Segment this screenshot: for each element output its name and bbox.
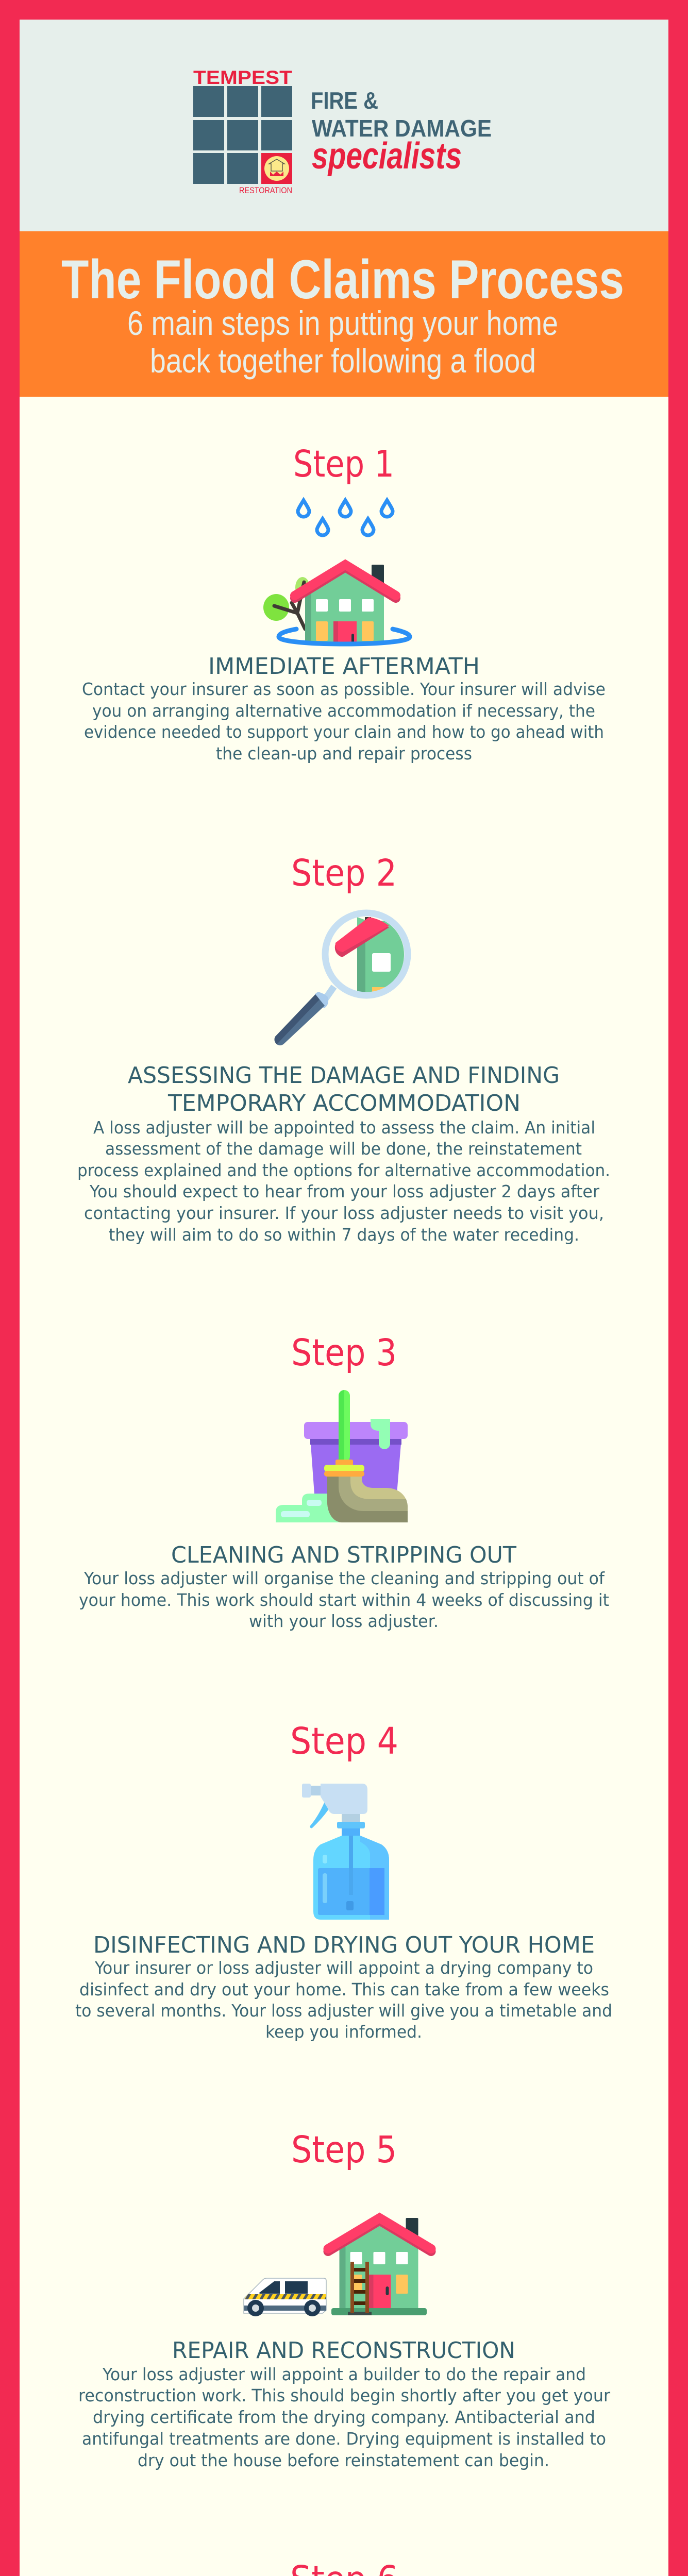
- step 5 body text: antifungal treatments are done. Drying equipment is installed to: [82, 2429, 606, 2449]
- step 2 label: Step 2: [291, 852, 397, 894]
- step 5: [78, 2128, 610, 2470]
- step 5 body text: dry out the house before reinstatement can begin.: [138, 2450, 549, 2470]
- step 4 body text: Your insurer or loss adjuster will appoint a drying company to: [94, 1958, 593, 1978]
- icon: bucket and mop: [276, 1390, 408, 1522]
- panel: title banner: [20, 231, 668, 397]
- step 2 body text: [77, 1117, 610, 1245]
- step 2: [77, 852, 610, 1245]
- icon: flooded house: [263, 565, 410, 644]
- step 3: [79, 1331, 609, 1631]
- icon: magnifying glass over house: [275, 913, 408, 1045]
- step 3 body text: [79, 1568, 609, 1631]
- step 3 label: Step 3: [291, 1331, 397, 1374]
- step 4 body text: disinfect and dry out your home. This can take from a few weeks: [79, 1979, 609, 1999]
- step 4: [75, 1720, 612, 2042]
- step 4 body text: keep you informed.: [265, 2022, 422, 2042]
- logo: Tempest top: TEMPEST: [193, 67, 292, 88]
- step 1 body text: you on arranging alternative accommodation if necessary, the: [92, 701, 595, 721]
- step 2 body text: assessment of the damage will be done, the reinstatement: [105, 1139, 582, 1159]
- logo: Tempest top: FIRE &: [311, 87, 378, 114]
- logo: Tempest top: specialists: [312, 135, 462, 177]
- step 2 heading: [128, 1062, 560, 1116]
- step 2 body text: You should expect to hear from your loss adjuster 2 days after: [89, 1181, 599, 1201]
- icon: spray bottle: [302, 1784, 389, 1920]
- step 1 body text: Contact your insurer as soon as possible. Your insurer will advise: [82, 679, 606, 699]
- step 5 body text: reconstruction work. This should begin shortly after you get your: [78, 2385, 610, 2405]
- logo: Tempest top: [193, 67, 492, 195]
- step 4 body text: [75, 1958, 612, 2042]
- step 3 heading: CLEANING AND STRIPPING OUT: [171, 1542, 516, 1568]
- step 2 body text: contacting your insurer. If your loss adjuster needs to visit you,: [84, 1203, 604, 1223]
- logo: Tempest top: WATER DAMAGE: [312, 115, 492, 142]
- step 2 body text: they will aim to do so within 7 days of the water receding.: [109, 1225, 579, 1245]
- subtitle: back together following a flood: [150, 342, 536, 380]
- step 3 body text: with your loss adjuster.: [249, 1611, 439, 1631]
- icon: house with ladder and van: [244, 2218, 431, 2316]
- step 1 label: Step 1: [293, 443, 394, 485]
- logo: Tempest top: RESTORATION: [239, 185, 292, 195]
- panel: steps background: [20, 397, 668, 2576]
- step 4 body text: to several months. Your loss adjuster will give you a timetable and: [75, 2001, 612, 2021]
- subtitle: [127, 304, 558, 380]
- step 1: [82, 443, 606, 764]
- step 5 heading: REPAIR AND RECONSTRUCTION: [172, 2337, 515, 2364]
- step 2 body text: process explained and the options for alternative accommodation.: [77, 1160, 610, 1180]
- step 5 body text: Your loss adjuster will appoint a builder to do the repair and: [102, 2364, 586, 2384]
- step 4 label: Step 4: [290, 1720, 398, 1762]
- subtitle: 6 main steps in putting your home: [127, 304, 558, 342]
- step 5 body text: [78, 2364, 610, 2470]
- step 1 body text: the clean-up and repair process: [216, 743, 472, 764]
- step 2 heading: TEMPORARY ACCOMMODATION: [167, 1090, 521, 1116]
- step 1 heading: IMMEDIATE AFTERMATH: [208, 653, 480, 680]
- step 4 heading: DISINFECTING AND DRYING OUT YOUR HOME: [93, 1932, 595, 1958]
- step 5 label: Step 5: [291, 2128, 397, 2171]
- step 2 body text: A loss adjuster will be appointed to assess the claim. An initial: [93, 1117, 595, 1138]
- step 3 body text: your home. This work should start within 4 weeks of discussing it: [79, 1590, 609, 1610]
- panel: logo header: [20, 20, 668, 231]
- step 5 body text: drying certificate from the drying company. Antibacterial and: [93, 2407, 595, 2427]
- step 1 body text: [82, 679, 606, 764]
- step 2 heading: ASSESSING THE DAMAGE AND FINDING: [128, 1062, 560, 1089]
- step 3 body text: Your loss adjuster will organise the cleaning and stripping out of: [83, 1568, 605, 1588]
- icon: rain drops: [298, 500, 393, 535]
- step 1 body text: evidence needed to support your clain and how to go ahead with: [84, 722, 604, 742]
